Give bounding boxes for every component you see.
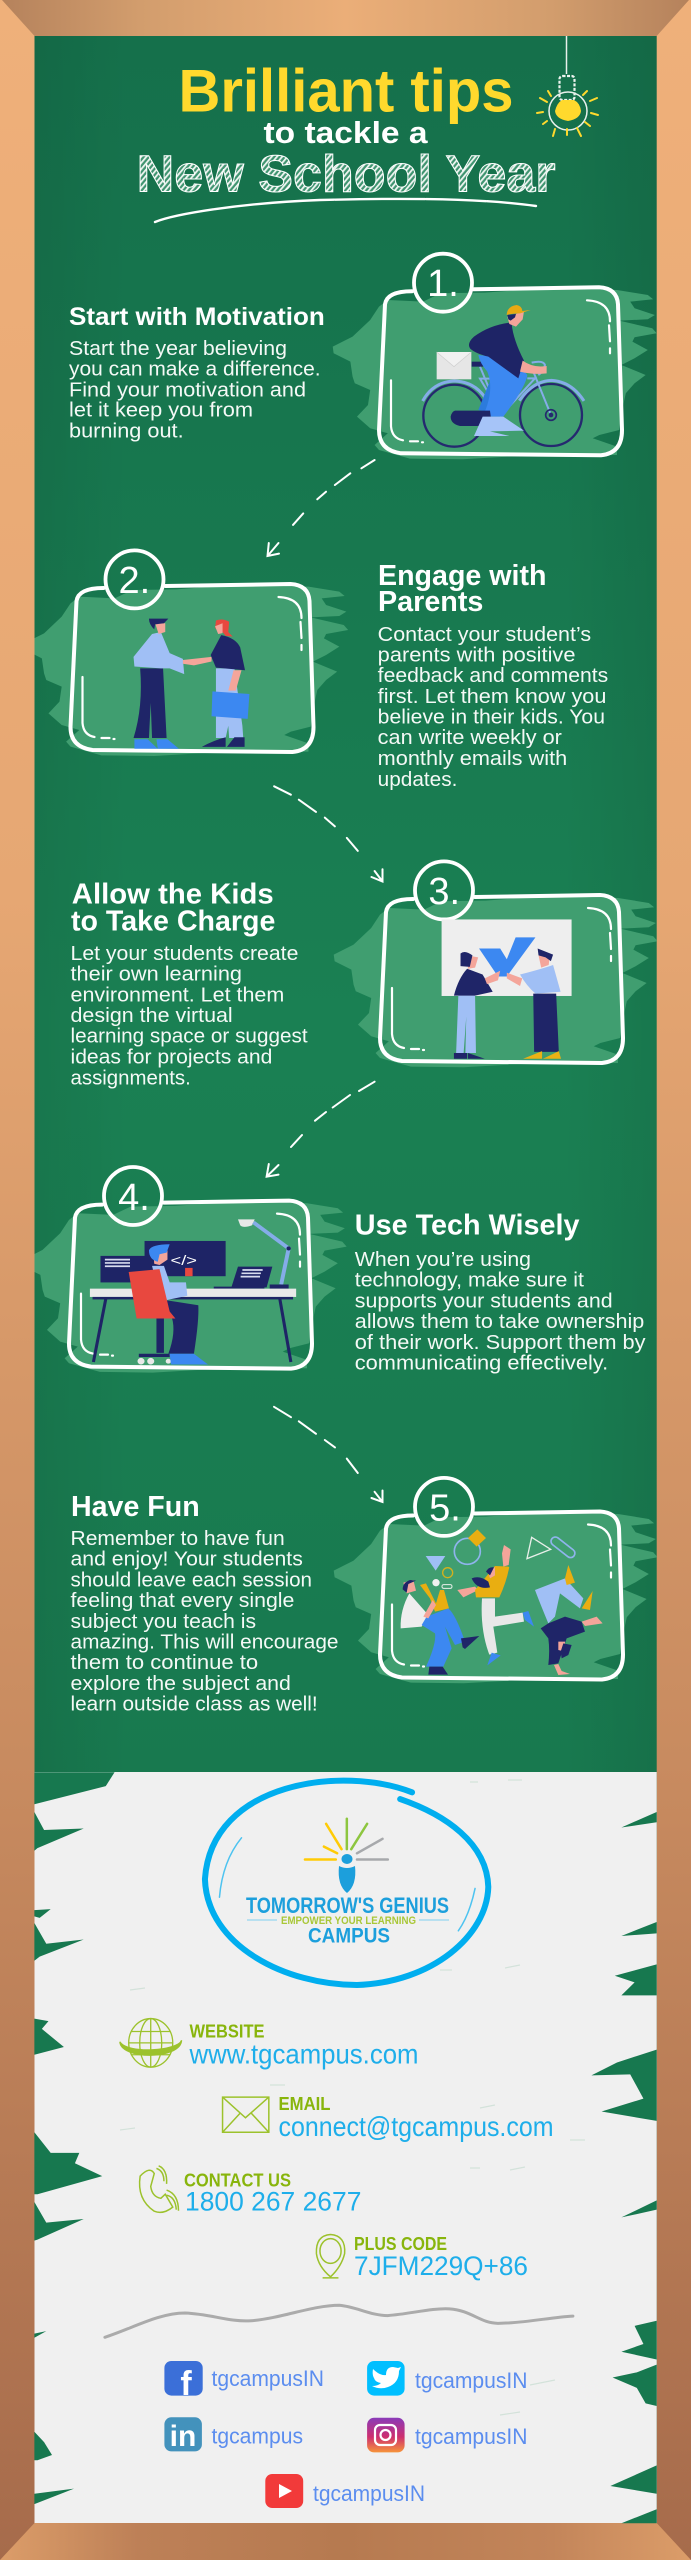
heading: Have Fun (71, 1491, 200, 1523)
text block: subject you teach is (70, 1610, 256, 1633)
social: facebook (164, 2361, 324, 2403)
text block: can write weekly or (378, 726, 562, 749)
text block: communicating effectively. (355, 1352, 608, 1374)
illustration: brush patch and frame 4 (23, 1167, 347, 1373)
text block: When you’re using (355, 1248, 531, 1271)
text block: allows them to take ownership (355, 1310, 644, 1333)
text block: them to continue to (70, 1651, 258, 1674)
text block: believe in their kids. You (378, 706, 605, 728)
heading: Start with Motivation (69, 303, 325, 331)
text block (69, 337, 321, 442)
icon: hanging light bulb (537, 36, 598, 136)
illustration: brush patch and frame 5 (334, 1478, 658, 1683)
title (137, 58, 556, 222)
illustration: brush patch and frame 3 (334, 861, 658, 1067)
panel: tip 1 (69, 254, 657, 459)
text block: Contact your student’s (378, 623, 591, 646)
illustration: people with check mark (442, 919, 572, 1059)
illustration: brush patch and frame 4: 4. (118, 1177, 150, 1219)
contact: phone: 1800 267 2677 (185, 2187, 361, 2217)
illustration: brush patch and frame 5: 5. (429, 1488, 461, 1530)
text block: environment. Let them (70, 983, 284, 1006)
text block: of their work. Support them by (355, 1331, 646, 1354)
arrow: 3 to 4 (267, 1082, 375, 1177)
illustration: person at desk: </> (171, 1253, 197, 1269)
illustration: brush patch and frame 1: 1. (427, 263, 459, 305)
logo: Tomorrow's Genius Campus: TOMORROW'S GENIUS (246, 1893, 449, 1918)
illustration: person at desk (90, 1219, 296, 1365)
text block: their own learning (70, 963, 242, 986)
contact: plus code (316, 2234, 528, 2281)
text block (378, 623, 608, 791)
text block: design the virtual (70, 1004, 233, 1027)
social: linkedin: in (170, 2420, 196, 2453)
text block: burning out. (69, 419, 184, 442)
contact: email: EMAIL (278, 2094, 330, 2114)
illustration: cyclist (423, 305, 584, 447)
panel: tip 4 (23, 1167, 646, 1374)
text block: updates. (378, 768, 457, 791)
title: New School Year (137, 146, 556, 204)
text block: Remember to have fun (70, 1527, 285, 1550)
heading (378, 560, 546, 618)
illustration: brush patch and frame 1 (333, 254, 657, 459)
social: twitter: tgcampusIN (415, 2368, 528, 2393)
arrow: 4 to 5 (274, 1407, 382, 1502)
contact: phone (140, 2166, 361, 2217)
text block: parents with positive (378, 644, 576, 666)
text block: feeling that every single (70, 1589, 294, 1612)
social: facebook: f (180, 2365, 192, 2403)
arrow: 1 to 2 (268, 460, 375, 556)
panel: tip 5 (70, 1478, 658, 1716)
icon: envelope (223, 2097, 269, 2132)
heading (71, 879, 275, 938)
text block: technology, make sure it (355, 1269, 584, 1292)
contact: website: www.tgcampus.com (189, 2038, 418, 2070)
text block: amazing. This will encourage (70, 1630, 338, 1654)
text block: you can make a difference. (69, 358, 321, 381)
logo: Tomorrow's Genius Campus: EMPOWER YOUR LEARNING (281, 1915, 416, 1927)
contact: plus code: PLUS CODE (354, 2234, 447, 2254)
contact: website (120, 2019, 419, 2070)
logo ring (205, 1781, 488, 1985)
text block: Let your students create (70, 942, 298, 965)
illustration: brush patch and frame 2 (24, 550, 348, 756)
text block: Find your motivation and (69, 378, 306, 401)
illustration: dancing people (401, 1529, 603, 1675)
icon: map pin (316, 2234, 345, 2278)
panel: tip 3 (70, 861, 658, 1089)
text block: supports your students and (355, 1289, 613, 1312)
logo: Tomorrow's Genius Campus: CAMPUS (308, 1925, 390, 1948)
illustration: handshake (134, 619, 249, 749)
heading: Parents (378, 586, 483, 618)
text block: should leave each session (70, 1568, 312, 1591)
illustration: brush patch and frame 2: 2. (119, 560, 150, 602)
divider: wavy grey line (105, 2305, 573, 2337)
text block: let it keep you from (69, 399, 253, 422)
social: youtube (265, 2474, 425, 2508)
text block (70, 1527, 338, 1716)
social: instagram: tgcampusIN (415, 2424, 528, 2449)
contact: website: WEBSITE (190, 2022, 264, 2042)
title: Brilliant tips (178, 58, 514, 125)
contact: phone: CONTACT US (184, 2170, 291, 2190)
social: twitter (367, 2361, 528, 2396)
arrow: 2 to 3 (274, 786, 382, 882)
social: youtube: tgcampusIN (313, 2481, 425, 2506)
social: linkedin: tgcampus (212, 2424, 303, 2449)
text block: learning space or suggest (70, 1025, 308, 1048)
illustration: brush patch and frame 3: 3. (428, 871, 460, 913)
panel: torn white contact sheet (34, 1772, 657, 2523)
text block: explore the subject and (70, 1672, 291, 1695)
text block (355, 1248, 646, 1374)
title: to tackle a (264, 115, 428, 150)
heading: Engage with (378, 560, 546, 592)
icon: globe (120, 2019, 182, 2067)
text block: learn outside class as well! (70, 1693, 318, 1716)
text block: assignments. (70, 1066, 191, 1089)
heading: Use Tech Wisely (355, 1210, 580, 1242)
text block: first. Let them know you (378, 685, 606, 708)
text block (70, 942, 308, 1089)
social: instagram (367, 2418, 528, 2452)
social: facebook: tgcampusIN (212, 2366, 324, 2391)
text block: feedback and comments (378, 664, 608, 687)
text block: monthly emails with (378, 747, 567, 770)
text block: Start the year believing (69, 337, 287, 360)
contact: email: connect@tgcampus.com (278, 2111, 554, 2142)
heading: Allow the Kids (72, 879, 274, 911)
contact: email (223, 2094, 554, 2142)
panel: tip 2 (24, 550, 608, 791)
social: linkedin (164, 2417, 303, 2453)
text block: ideas for projects and (70, 1045, 272, 1068)
logo: Tomorrow's Genius Campus (205, 1781, 488, 1985)
icon: phone handset (140, 2166, 178, 2212)
heading: to Take Charge (71, 906, 275, 938)
text block: and enjoy! Your students (70, 1548, 303, 1571)
contact: plus code: 7JFM229Q+86 (354, 2251, 528, 2281)
